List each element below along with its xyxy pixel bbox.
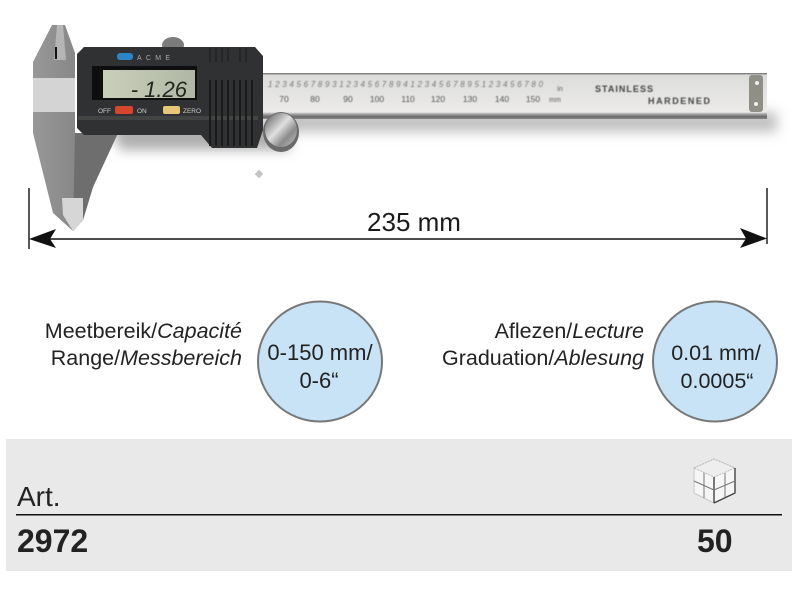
caliper photo	[33, 25, 777, 231]
beam inch scale: 1 2 3 4 5 6 7 8 9 3 1 2 3 4 5 6 7 8 9 4 1 2 3 4 5 6 7 8 9 5 1 2 3 4 5 6 7 8 0	[268, 80, 544, 89]
graduation circle	[653, 302, 777, 422]
beam mm scale: 70	[279, 94, 289, 104]
zero button	[163, 106, 201, 115]
graduation label	[442, 319, 644, 370]
off button	[98, 106, 147, 115]
beam label hardened: HARDENED	[648, 96, 710, 106]
beam end plate	[749, 75, 763, 112]
table rule	[16, 514, 782, 516]
range circle: 0-6“	[299, 368, 339, 393]
dimension arrow: 235 mm	[29, 188, 767, 249]
speck	[255, 170, 263, 178]
beam mm scale: 120	[431, 94, 445, 104]
beam mm scale: 90	[343, 94, 353, 104]
off button: ON	[137, 108, 147, 115]
beam mm scale: 130	[463, 94, 477, 104]
beam ticks	[266, 104, 543, 112]
brand logo	[117, 53, 133, 60]
range label: Range/Messbereich	[51, 346, 242, 370]
off button: OFF	[98, 108, 111, 115]
beam mm scale: in	[557, 86, 563, 93]
drop shadow	[110, 112, 777, 150]
display body: ACME	[137, 55, 170, 62]
beam mm scale: mm	[549, 97, 561, 104]
beam label stainless: STAINLESS	[595, 84, 653, 94]
fixed jaw	[33, 25, 118, 231]
beam	[258, 73, 767, 119]
range label: Meetbereik/Capacité	[45, 319, 242, 343]
dimension value: 235 mm	[367, 207, 461, 237]
beam mm scale: 150	[526, 94, 540, 104]
article table	[6, 439, 792, 571]
lcd screen	[92, 66, 197, 100]
beam mm scale: 80	[310, 94, 320, 104]
beam mm scale: 140	[495, 94, 509, 104]
graduation circle: 0.0005“	[681, 369, 753, 393]
beam mm scale: 110	[401, 94, 415, 104]
grip ridges	[210, 80, 252, 146]
range circle: 0-150 mm/	[267, 340, 373, 365]
thumb wheel	[263, 112, 299, 152]
zero button: ZERO	[183, 108, 201, 115]
graduation label: Graduation/Ablesung	[442, 346, 644, 370]
thumb button	[162, 37, 184, 53]
graduation label: Aflezen/Lecture	[495, 319, 644, 343]
graduation circle: 0.01 mm/	[671, 341, 761, 365]
display body	[77, 47, 263, 148]
range label	[45, 319, 242, 370]
beam mm scale	[279, 86, 563, 104]
pack quantity: 50	[697, 523, 733, 559]
article number: 2972	[17, 523, 88, 559]
beam mm scale: 100	[370, 94, 384, 104]
range circle	[258, 302, 382, 422]
lcd reading: - 1.26	[131, 77, 188, 102]
table header: Art.: Art.	[17, 481, 61, 512]
icon: packaging cube	[694, 459, 735, 503]
